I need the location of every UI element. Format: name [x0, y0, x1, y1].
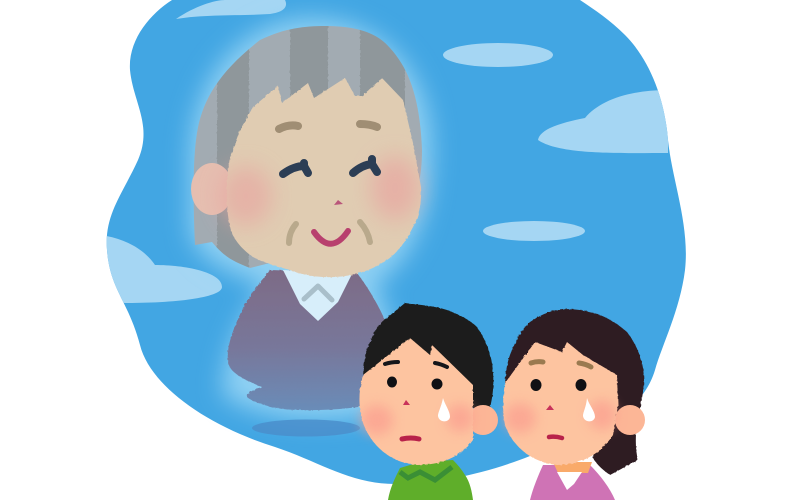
cloud: left [100, 235, 222, 303]
ear [191, 163, 233, 215]
girl eyebrows [531, 362, 591, 367]
cloud: middle right [483, 221, 585, 241]
sweater zigzag [400, 467, 452, 480]
boy nose [403, 400, 410, 405]
illustration: children remembering grandmother [106, 0, 686, 500]
eyebrow right [360, 124, 377, 127]
girl white collar [557, 472, 582, 490]
boy cheeks [361, 404, 474, 435]
cloud: top centre [443, 43, 553, 67]
hair darker stripes [217, 20, 405, 280]
girl pink sweater [530, 465, 615, 500]
grey hair [194, 26, 422, 268]
boy hair [363, 303, 493, 408]
blue memory cloud background [107, 0, 686, 484]
grandmother collar [283, 270, 352, 321]
boy mouth [402, 438, 419, 439]
collar line [304, 286, 332, 300]
smiling eye right [353, 159, 377, 173]
face [227, 78, 421, 277]
cloud: right [538, 90, 668, 153]
cheek right [371, 156, 419, 220]
girl cheeks [504, 400, 616, 433]
girl eyes [530, 379, 586, 391]
girl mouth [549, 437, 562, 438]
boy ear [468, 405, 498, 435]
boy face [359, 338, 473, 465]
girl hair [505, 309, 644, 475]
smile [314, 231, 348, 244]
wrinkles [289, 222, 370, 243]
boy eyebrows [385, 362, 447, 367]
girl [503, 309, 645, 500]
grandmother apparition [190, 18, 432, 436]
girl ear [615, 405, 645, 435]
girl collar band [553, 462, 592, 473]
eyebrow left [279, 125, 298, 129]
nose [334, 200, 343, 205]
boy tear [438, 398, 450, 421]
boy [359, 303, 498, 500]
boy eyes [387, 376, 442, 390]
white glow behind grandmother [190, 18, 432, 420]
hair light base [194, 26, 422, 268]
girl tear [583, 398, 595, 421]
grandmother body [228, 270, 392, 410]
cheek left [220, 166, 272, 226]
boy green sweater [388, 460, 473, 500]
cloud: top left [176, 0, 286, 19]
girl nose [546, 405, 554, 410]
smiling eye left [283, 163, 308, 174]
white clouds in the sky [100, 0, 668, 303]
reflection under grandmother [252, 420, 360, 436]
girl face [503, 342, 618, 465]
